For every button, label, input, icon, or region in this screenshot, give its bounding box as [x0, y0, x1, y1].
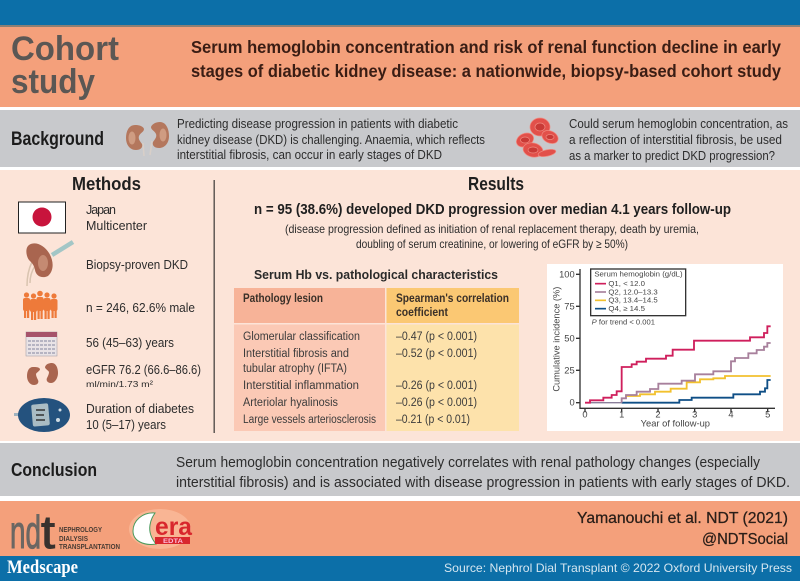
heading: cohort study — [11, 30, 119, 101]
text: sample size: n = 246, 62.6% male — [86, 301, 195, 315]
chart: cumulative incidence: 2 — [655, 409, 661, 419]
heading: cohort study: study — [11, 63, 95, 101]
chart legend: Serum hemoglobin (g/dL) — [594, 270, 683, 279]
p for trend: P for trend < 0.001 — [592, 317, 655, 326]
title: Serum hemoglobin concentration and risk of renal function decline in early — [191, 37, 781, 57]
footer panel — [0, 501, 800, 558]
title: stages of diabetic kidney disease: a nationwide, biopsy-based cohort study — [191, 61, 781, 81]
icon: people — [23, 291, 58, 320]
table: serum Hb vs pathological characteristics: coefficient — [396, 307, 448, 319]
chart legend: Q1, < 12.0 — [608, 279, 645, 288]
heading: conclusion: Conclusion — [11, 460, 97, 480]
chart: cumulative incidence: 0 — [582, 409, 588, 419]
table: serum Hb vs pathological characteristics: –0.21 (p < 0.01) — [396, 414, 470, 426]
table: serum Hb vs pathological characteristics: Interstitial inflammation — [243, 380, 359, 392]
heading: cohort study: Cohort — [11, 30, 119, 68]
chart: cumulative incidence: Cumulative incidence (%) — [552, 287, 562, 392]
chart: cumulative incidence: 50 — [564, 333, 575, 343]
bottom blue band — [0, 556, 800, 581]
panel: methods — [14, 174, 201, 432]
logo: NDT: NEPHROLOGY — [59, 525, 102, 534]
icon: glucose meter — [14, 398, 70, 432]
logo: NDT: TRANSPLANTATION — [59, 542, 120, 551]
text block: definition of progression: doubling of serum creatinine, or lowering of eGFR by ≥ 50%) — [356, 237, 628, 251]
text block: research question: as a marker to predict DKD progression? — [569, 149, 775, 163]
icon: kidneys — [126, 122, 169, 156]
logo: Medscape: Medscape — [7, 557, 78, 578]
heading: background: Background — [11, 129, 104, 150]
chart: cumulative incidence: 3 — [692, 409, 697, 419]
table: serum Hb vs pathological characteristics: Spearman's correlation — [396, 293, 509, 305]
chart: cumulative incidence: 25 — [564, 365, 575, 375]
table: serum Hb vs pathological characteristics: Glomerular classification — [243, 331, 360, 343]
top blue band — [0, 0, 800, 25]
icon: kidney biopsy — [26, 242, 73, 286]
key result: n = 95 (38.6%) developed DKD progression over median 4.1 years follow-up — [254, 201, 731, 218]
logo: ERA-EDTA — [129, 509, 193, 549]
text: age: 56 (45–63) years — [86, 336, 174, 350]
icon: kidneys small — [27, 363, 58, 385]
text: eGFR: eGFR 76.2 (66.6–86.6) — [86, 363, 201, 377]
text block: research question — [569, 117, 788, 163]
text block: conclusion statement: Serum hemoglobin concentration negatively correlates with renal pathology changes (especially — [176, 455, 761, 471]
text block: definition of progression: (disease progression defined as initiation of renal replacement therapy, death by uremia, — [285, 222, 699, 236]
table: serum Hb vs pathological characteristics — [234, 268, 519, 431]
text block: research question: Could serum hemoglobin concentration, as — [569, 117, 788, 131]
logo: NDT — [10, 506, 120, 558]
text: diabetes duration: 10 (5–17) years — [86, 418, 166, 432]
chart: cumulative incidence — [547, 264, 783, 431]
text block: conclusion statement: interstitial fibrosis) and is associated with disease progression in patients with early stages of DKD. — [176, 475, 790, 491]
logo: ERA-EDTA: era — [155, 513, 193, 541]
text: diabetes duration: Duration of diabetes — [86, 402, 194, 416]
text block: background statement: kidney disease (DKD) is challenging. Anaemia, which reflects — [177, 133, 485, 147]
panel: results — [234, 174, 783, 431]
text block: research question: a reflection of interstitial fibrosis, be used — [569, 133, 782, 147]
citation — [577, 510, 788, 548]
chart: cumulative incidence: 75 — [564, 301, 575, 311]
chart legend — [591, 269, 686, 316]
logo: NDT: nd — [10, 506, 41, 558]
citation: @NDTSocial — [702, 531, 788, 548]
citation: Yamanouchi et al. NDT (2021) — [577, 510, 788, 527]
table: serum Hb vs pathological characteristics: Large vessels arteriosclerosis — [243, 414, 376, 426]
text block: background statement — [177, 117, 485, 162]
table: serum Hb vs pathological characteristics: Interstitial fibrosis and — [243, 348, 349, 360]
icon: japan flag — [18, 202, 66, 233]
table: serum Hb vs pathological characteristics: –0.52 (p < 0.001) — [396, 348, 477, 360]
chart legend: Q2, 12.0–13.3 — [608, 287, 658, 296]
icon: red blood cells — [514, 118, 560, 159]
heading: methods: Methods — [72, 174, 141, 194]
title — [191, 37, 781, 81]
source: Source: Nephrol Dial Transplant © 2022 Oxford University Press — [444, 561, 792, 575]
text: diabetes duration — [86, 402, 194, 432]
text: location: Japan — [86, 203, 116, 217]
logo: NDT: DIALYSIS — [59, 534, 88, 543]
table: serum Hb vs pathological characteristics: –0.26 (p < 0.001) — [396, 380, 477, 392]
text block: background statement: interstitial fibrosis, can occur in early stages of DKD — [177, 148, 442, 162]
text: location: Multicenter — [86, 219, 147, 233]
table: serum Hb vs pathological characteristics: tubular atrophy (IFTA) — [243, 363, 347, 375]
panel: main content background — [0, 170, 800, 441]
logo: ERA-EDTA: EDTA — [163, 539, 184, 545]
chart: cumulative incidence: 0 — [569, 398, 575, 408]
text: eGFR — [86, 363, 201, 389]
chart: cumulative incidence: Year of follow-up — [641, 419, 710, 429]
logo: NDT: t — [41, 506, 55, 558]
icon: calendar — [26, 332, 57, 356]
table: serum Hb vs pathological characteristics: –0.47 (p < 0.001) — [396, 331, 477, 343]
text block: background statement: Predicting disease progression in patients with diabetic — [177, 117, 458, 131]
text block: definition of progression — [285, 222, 699, 251]
chart: cumulative incidence: 100 — [559, 269, 575, 279]
text block: conclusion statement — [176, 455, 790, 491]
chart: cumulative incidence: 1 — [619, 409, 624, 419]
text: location — [86, 203, 147, 233]
chart legend: Q4, ≥ 14.5 — [608, 304, 645, 313]
panel: background — [0, 110, 800, 167]
table: serum Hb vs pathological characteristics: –0.26 (p < 0.001) — [396, 397, 477, 409]
table: serum Hb vs pathological characteristics: Pathology lesion — [243, 293, 323, 305]
table heading: Serum Hb vs. pathological characteristics — [254, 268, 498, 282]
chart legend: Q3, 13.4–14.5 — [608, 296, 658, 305]
text: biopsy: Biopsy-proven DKD — [86, 258, 188, 272]
header panel — [0, 25, 800, 107]
chart: cumulative incidence: 4 — [728, 409, 734, 419]
table: serum Hb vs pathological characteristics: Arteriolar hyalinosis — [243, 397, 338, 409]
panel: conclusion — [0, 443, 800, 496]
chart: cumulative incidence: 5 — [765, 409, 770, 419]
heading: results: Results — [468, 174, 524, 194]
text: eGFR: ml/min/1.73 m² — [86, 379, 153, 389]
